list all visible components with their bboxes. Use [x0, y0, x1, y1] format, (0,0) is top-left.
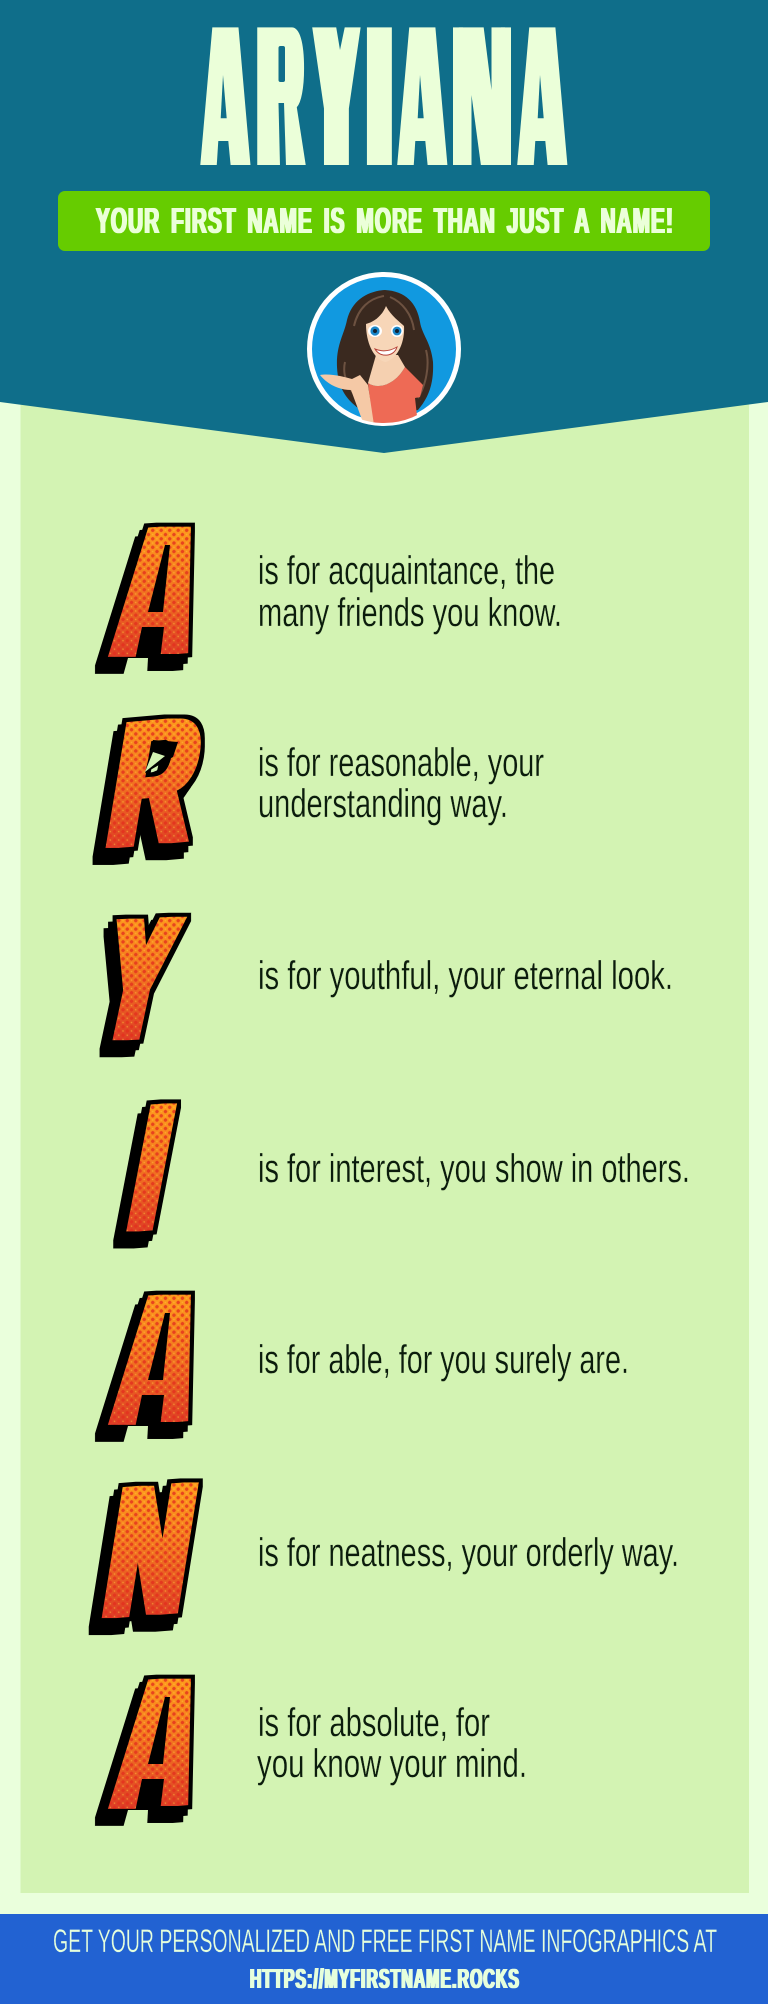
row text: R: is for reasonable, your — [258, 741, 544, 785]
footer — [0, 1914, 768, 2004]
letter A — [94, 1290, 195, 1442]
letter N: N — [95, 1440, 206, 1659]
letter R: R — [97, 676, 213, 888]
panel: letter list background — [20, 390, 749, 1893]
row text: A: is for able, for you surely are. — [258, 1338, 629, 1382]
letter A: A — [114, 1638, 203, 1849]
right eye — [391, 325, 403, 337]
letter A — [94, 1674, 195, 1826]
portrait avatar — [310, 274, 458, 425]
row text: A — [258, 549, 562, 635]
row text: A: is for absolute, for — [258, 1701, 490, 1745]
subtitle badge — [58, 191, 710, 251]
arm and hand — [320, 374, 374, 425]
hair highlight — [344, 296, 428, 398]
letter R — [92, 714, 205, 865]
footer: HTTPS://MYFIRSTNAME.ROCKS — [250, 1963, 520, 1994]
letter I: I — [118, 1063, 185, 1271]
mouth — [375, 347, 397, 355]
row text: A — [257, 1701, 527, 1786]
letter I — [113, 1099, 182, 1248]
letter Y: Y — [88, 880, 190, 1080]
row text: A: you know your mind. — [257, 1742, 527, 1786]
row text: R — [258, 741, 544, 826]
left eye — [368, 325, 382, 337]
header banner — [0, 0, 768, 453]
letter A — [94, 522, 195, 674]
letter A: A — [114, 486, 203, 697]
hair — [337, 290, 433, 420]
shirt — [368, 367, 423, 425]
face — [366, 306, 404, 362]
row text: A: is for acquaintance, the — [258, 549, 555, 593]
row text: R: understanding way. — [258, 782, 508, 826]
letter A: A — [114, 1254, 203, 1465]
letter N — [88, 1478, 203, 1636]
neck and chest — [368, 355, 405, 386]
letter Y — [100, 912, 192, 1058]
row text: A: many friends you know. — [258, 591, 562, 635]
